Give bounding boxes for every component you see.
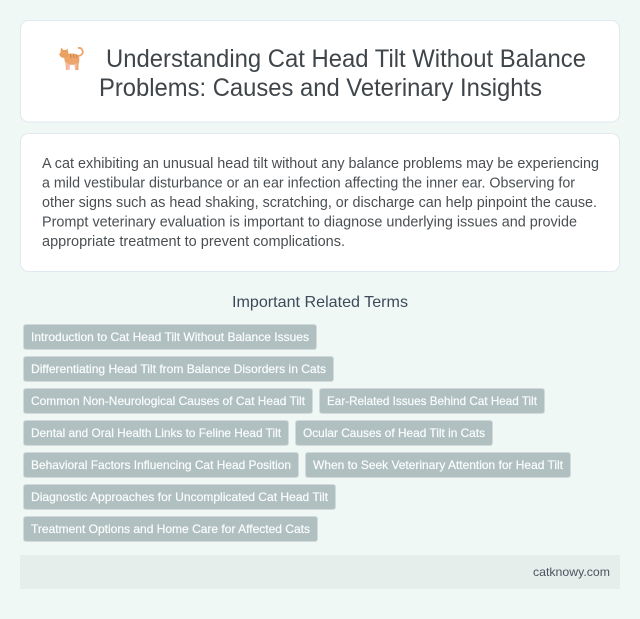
footer bar: [20, 555, 620, 589]
tag: [24, 420, 288, 446]
tag: Diagnostic Approaches for Uncomplicated Cat Head Tilt: [31, 490, 329, 504]
tag: Introduction to Cat Head Tilt Without Balance Issues: [31, 330, 309, 344]
tag: Ear-Related Issues Behind Cat Head Tilt: [327, 394, 538, 408]
tag: Behavioral Factors Influencing Cat Head Position: [31, 458, 291, 472]
description text: [42, 156, 599, 250]
title: [99, 45, 586, 102]
footer source: catknowy.com: [533, 565, 610, 579]
tag: Dental and Oral Health Links to Feline Head Tilt: [31, 426, 282, 440]
tag: [24, 516, 318, 542]
tag: [24, 452, 298, 478]
description text: a mild vestibular disturbance or an ear infection affecting the inner ear. Observing for: [42, 176, 575, 192]
tag: Ocular Causes of Head Tilt in Cats: [303, 426, 485, 440]
tag: [24, 356, 334, 382]
tag: When to Seek Veterinary Attention for Head Tilt: [313, 458, 564, 472]
panel: title card: [20, 20, 620, 122]
related term tags: [24, 324, 570, 542]
heading: related terms: Important Related Terms: [232, 294, 408, 311]
tag: [24, 388, 312, 414]
title: Understanding Cat Head Tilt Without Balance: [106, 45, 586, 73]
tag: [320, 388, 544, 414]
icon: cat: [59, 48, 83, 70]
title: Problems: Causes and Veterinary Insights: [99, 74, 542, 102]
description text: Prompt veterinary evaluation is important to diagnose underlying issues and provide: [42, 214, 577, 230]
tag: Common Non-Neurological Causes of Cat Head Tilt: [31, 394, 306, 408]
tag: [24, 484, 336, 510]
tag: Treatment Options and Home Care for Affected Cats: [31, 522, 310, 536]
tag: [306, 452, 570, 478]
panel: description card: [20, 134, 620, 272]
description text: A cat exhibiting an unusual head tilt without any balance problems may be experiencing: [42, 156, 599, 172]
tag: [24, 324, 316, 350]
tag: [296, 420, 492, 446]
description text: other signs such as head shaking, scratching, or discharge can help pinpoint the cause.: [42, 195, 597, 211]
description text: appropriate treatment to prevent complications.: [42, 234, 345, 250]
tag: Differentiating Head Tilt from Balance Disorders in Cats: [31, 362, 326, 376]
